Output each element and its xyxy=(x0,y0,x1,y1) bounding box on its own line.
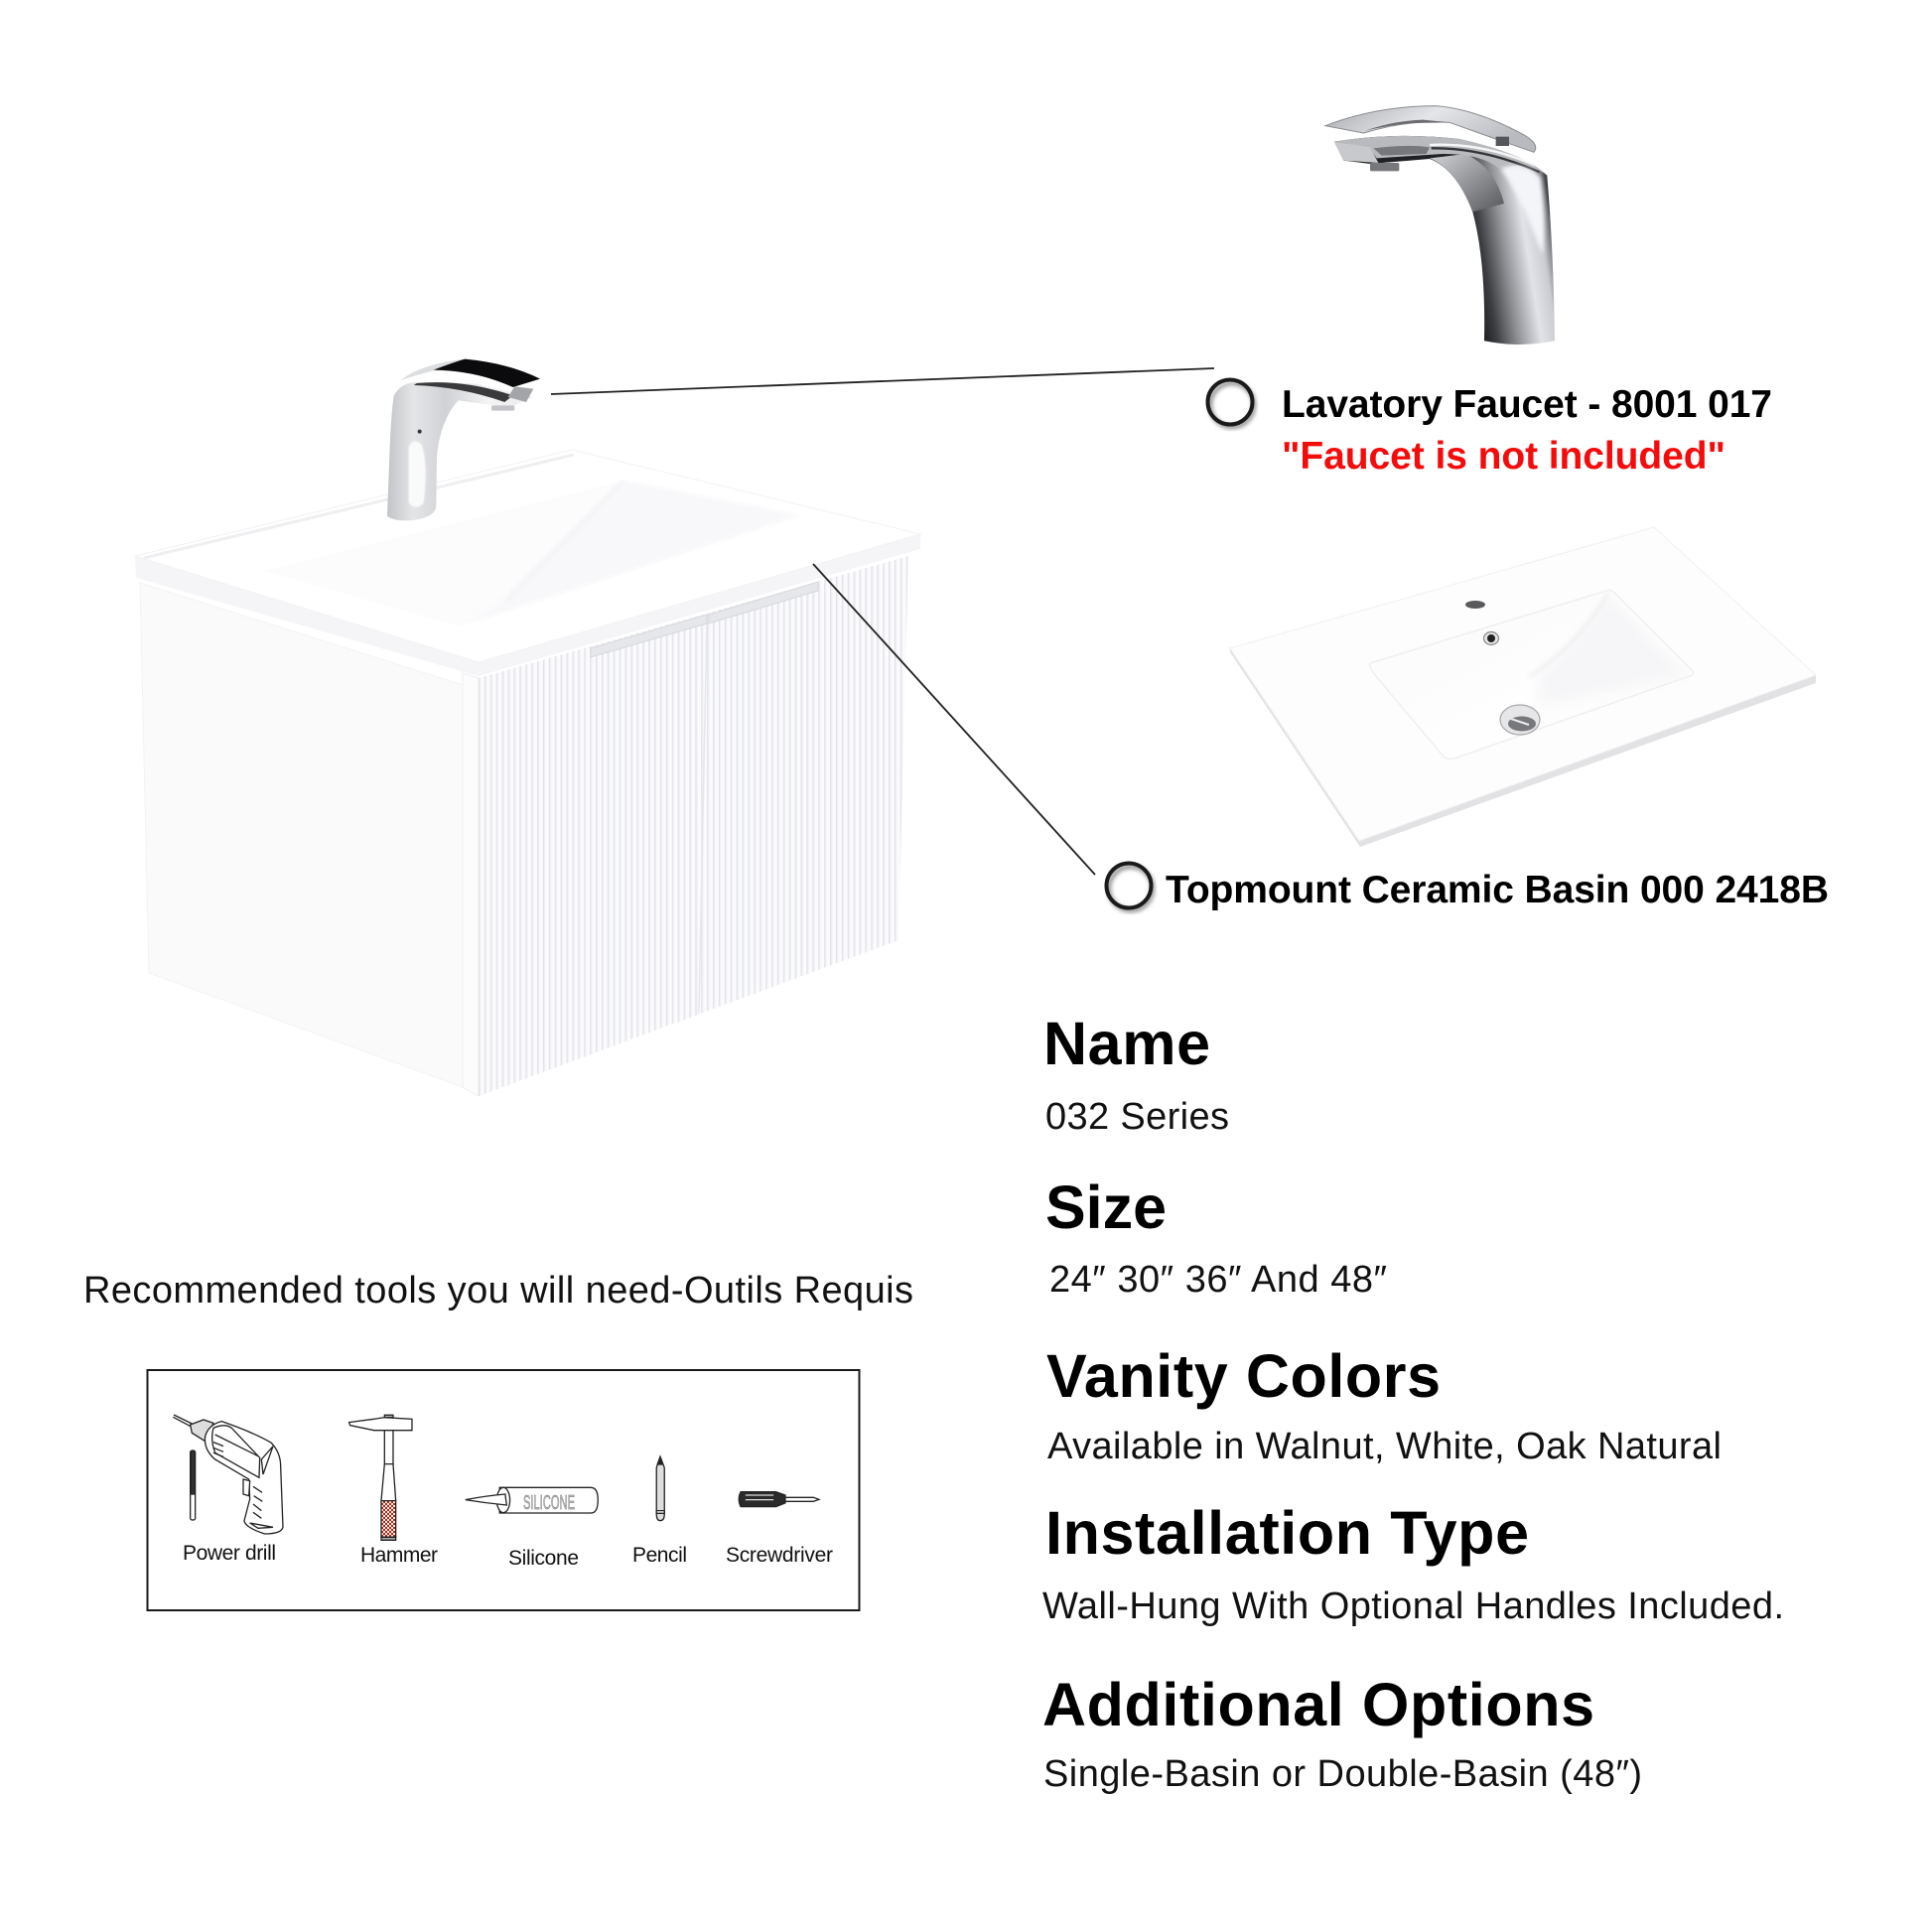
value: name: 032 Series xyxy=(1045,1096,1229,1138)
drawer split xyxy=(699,621,707,1013)
panel frame xyxy=(147,1370,860,1610)
lever underside xyxy=(1365,120,1449,131)
chrome speckle detail xyxy=(1373,146,1430,156)
icon: pencil xyxy=(656,1456,664,1521)
label: basin: Topmount Ceramic Basin 000 2418B xyxy=(1166,869,1829,911)
value: size: 24″ 30″ 36″ And 48″ xyxy=(1049,1259,1387,1301)
tube text: SILICONE xyxy=(523,1492,575,1514)
lever pivot xyxy=(1496,137,1509,146)
label: silicone: Silicone xyxy=(508,1547,579,1570)
counter edge xyxy=(135,534,920,676)
small faucet on vanity xyxy=(387,359,540,520)
basin crease xyxy=(506,481,623,601)
shoulder chrome top xyxy=(1334,136,1546,175)
heading: name: Name xyxy=(1043,1010,1210,1077)
label: power drill: Power drill xyxy=(183,1542,276,1565)
value: options: Single-Basin or Double-Basin (48″) xyxy=(1043,1753,1642,1795)
heading: additional options: Additional Options xyxy=(1042,1671,1594,1738)
basin bowl xyxy=(1370,590,1694,759)
label: faucet: Lavatory Faucet - 8001 017 xyxy=(1282,383,1772,426)
bowl back shading xyxy=(1539,594,1686,707)
lower spout dark detail xyxy=(414,382,513,402)
spout tip xyxy=(508,386,533,402)
label: pencil: Pencil xyxy=(632,1544,687,1567)
value: colors: Available in Walnut, White, Oak Natural xyxy=(1047,1426,1722,1467)
callout line: basin xyxy=(813,564,1095,875)
basin facet right xyxy=(459,481,800,626)
label: faucet not included: "Faucet is not included" xyxy=(1282,435,1725,478)
heading: size: Size xyxy=(1045,1173,1167,1241)
tools heading: Recommended tools you will need-Outils Requis xyxy=(83,1270,913,1311)
shoulder highlight xyxy=(1501,166,1544,255)
ceramic basin product xyxy=(1230,527,1816,847)
basin plate xyxy=(1230,527,1816,841)
value: installation: Wall-Hung With Optional Handles Included. xyxy=(1042,1586,1784,1627)
cabinet side trim xyxy=(463,673,479,1096)
heading: vanity colors: Vanity Colors xyxy=(1046,1342,1441,1410)
large chrome faucet xyxy=(1325,106,1555,345)
basin facet left xyxy=(264,481,623,626)
handle right xyxy=(709,582,818,623)
label: hammer: Hammer xyxy=(360,1544,438,1567)
cabinet side panel xyxy=(140,583,463,1087)
lever silver top xyxy=(400,359,540,387)
overflow xyxy=(1483,631,1499,645)
counter top xyxy=(135,450,920,662)
callout line: faucet xyxy=(551,368,1214,394)
marker circle: faucet xyxy=(1207,379,1254,427)
counter back lip xyxy=(144,455,574,558)
tap hole xyxy=(1465,601,1485,609)
basin front edge xyxy=(1230,648,1816,847)
faucet body xyxy=(387,382,533,520)
spout xyxy=(1334,136,1555,345)
aerator xyxy=(491,405,514,411)
marker circle: basin xyxy=(1106,864,1153,910)
heading: installation type: Installation Type xyxy=(1045,1499,1529,1567)
drain xyxy=(1500,705,1540,735)
specs block xyxy=(1042,1010,1784,1795)
lever black face xyxy=(434,359,540,387)
faucet highlight xyxy=(409,442,426,507)
handle left xyxy=(591,615,707,657)
ribbed drawer front xyxy=(479,556,908,1096)
tools panel xyxy=(147,1370,860,1610)
lever xyxy=(1325,106,1536,152)
icon: hammer xyxy=(349,1415,412,1540)
aerator xyxy=(1370,163,1399,171)
neck shading xyxy=(1430,154,1504,211)
icon: silicone tube xyxy=(466,1487,598,1514)
chrome white band xyxy=(1430,145,1536,166)
spout tip xyxy=(1334,142,1378,163)
icon: screwdriver xyxy=(739,1492,819,1507)
icon: power drill xyxy=(173,1415,283,1534)
chrome dark band xyxy=(1432,148,1540,172)
vanity cabinet illustration xyxy=(135,450,920,1096)
bowl crease xyxy=(1529,593,1608,677)
label: screwdriver: Screwdriver xyxy=(726,1544,833,1567)
sensor dot xyxy=(418,430,422,434)
